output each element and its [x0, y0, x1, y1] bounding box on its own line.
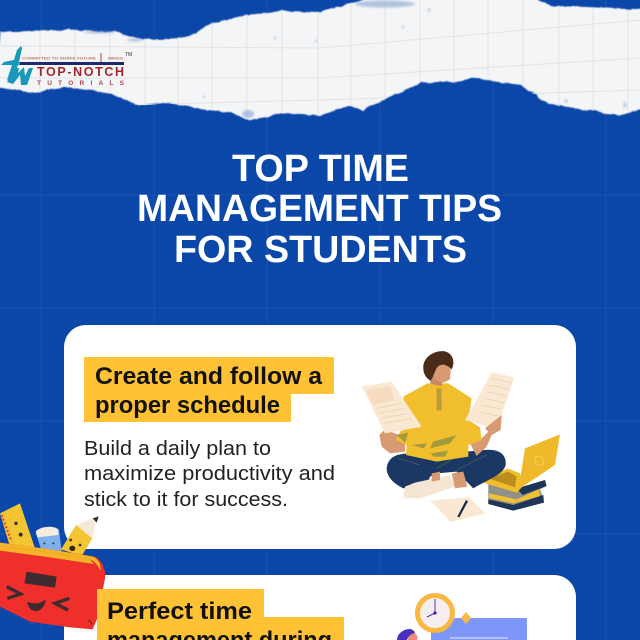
face [431, 365, 451, 383]
neck [429, 375, 443, 386]
tip 2 heading [97, 589, 344, 640]
tip 2 heading: Perfect time [107, 598, 252, 625]
trademark: TM [125, 52, 132, 58]
illustration: clock and screen [397, 596, 527, 640]
panel: tip 1 [64, 325, 576, 549]
tip 1 text: stick to it for success. [84, 489, 288, 511]
logo bar [20, 62, 124, 65]
title: FOR STUDENTS [174, 229, 467, 271]
left paper [362, 382, 422, 433]
clock [418, 596, 452, 630]
figure head [408, 633, 417, 640]
pencil case with stationery [0, 503, 105, 629]
tip 1 text: maximize productivity and [84, 463, 335, 485]
legs [387, 450, 506, 488]
title: MANAGEMENT TIPS [137, 188, 502, 230]
tip 1 heading: Create and follow a [95, 363, 323, 390]
illustration: student with papers and laptop [362, 351, 560, 522]
shirt [396, 383, 482, 462]
right paper [465, 372, 514, 429]
panel: tip 2 [64, 575, 576, 640]
hair [423, 351, 453, 381]
laptop [474, 469, 523, 493]
right hand [485, 415, 502, 435]
logo torch [100, 53, 102, 62]
paper on floor with pen [431, 497, 485, 522]
tip 1 text: Build a daily plan to [84, 438, 271, 460]
ruler [0, 503, 35, 548]
logo emblem [1, 46, 33, 85]
logo [1, 46, 132, 87]
pencil [61, 516, 99, 556]
logo name: TOP-NOTCH [37, 65, 124, 79]
tip 1 text [84, 438, 335, 511]
socks and feet [403, 475, 455, 498]
tip 1 heading: proper schedule [95, 392, 280, 419]
torn paper banner [0, 0, 640, 120]
logo: MINDS [108, 56, 123, 60]
logo subtitle: TUTORIALS [37, 80, 125, 87]
tip 1 heading [84, 357, 334, 422]
logo tagline: COMMITTED TO SHAPE FUTURE [22, 56, 96, 60]
screen [431, 618, 527, 640]
case body [0, 543, 105, 629]
sparkle [461, 612, 471, 624]
books [488, 480, 547, 511]
title [137, 148, 502, 271]
eraser [36, 527, 62, 552]
title: TOP TIME [232, 148, 409, 190]
arms [379, 429, 405, 453]
